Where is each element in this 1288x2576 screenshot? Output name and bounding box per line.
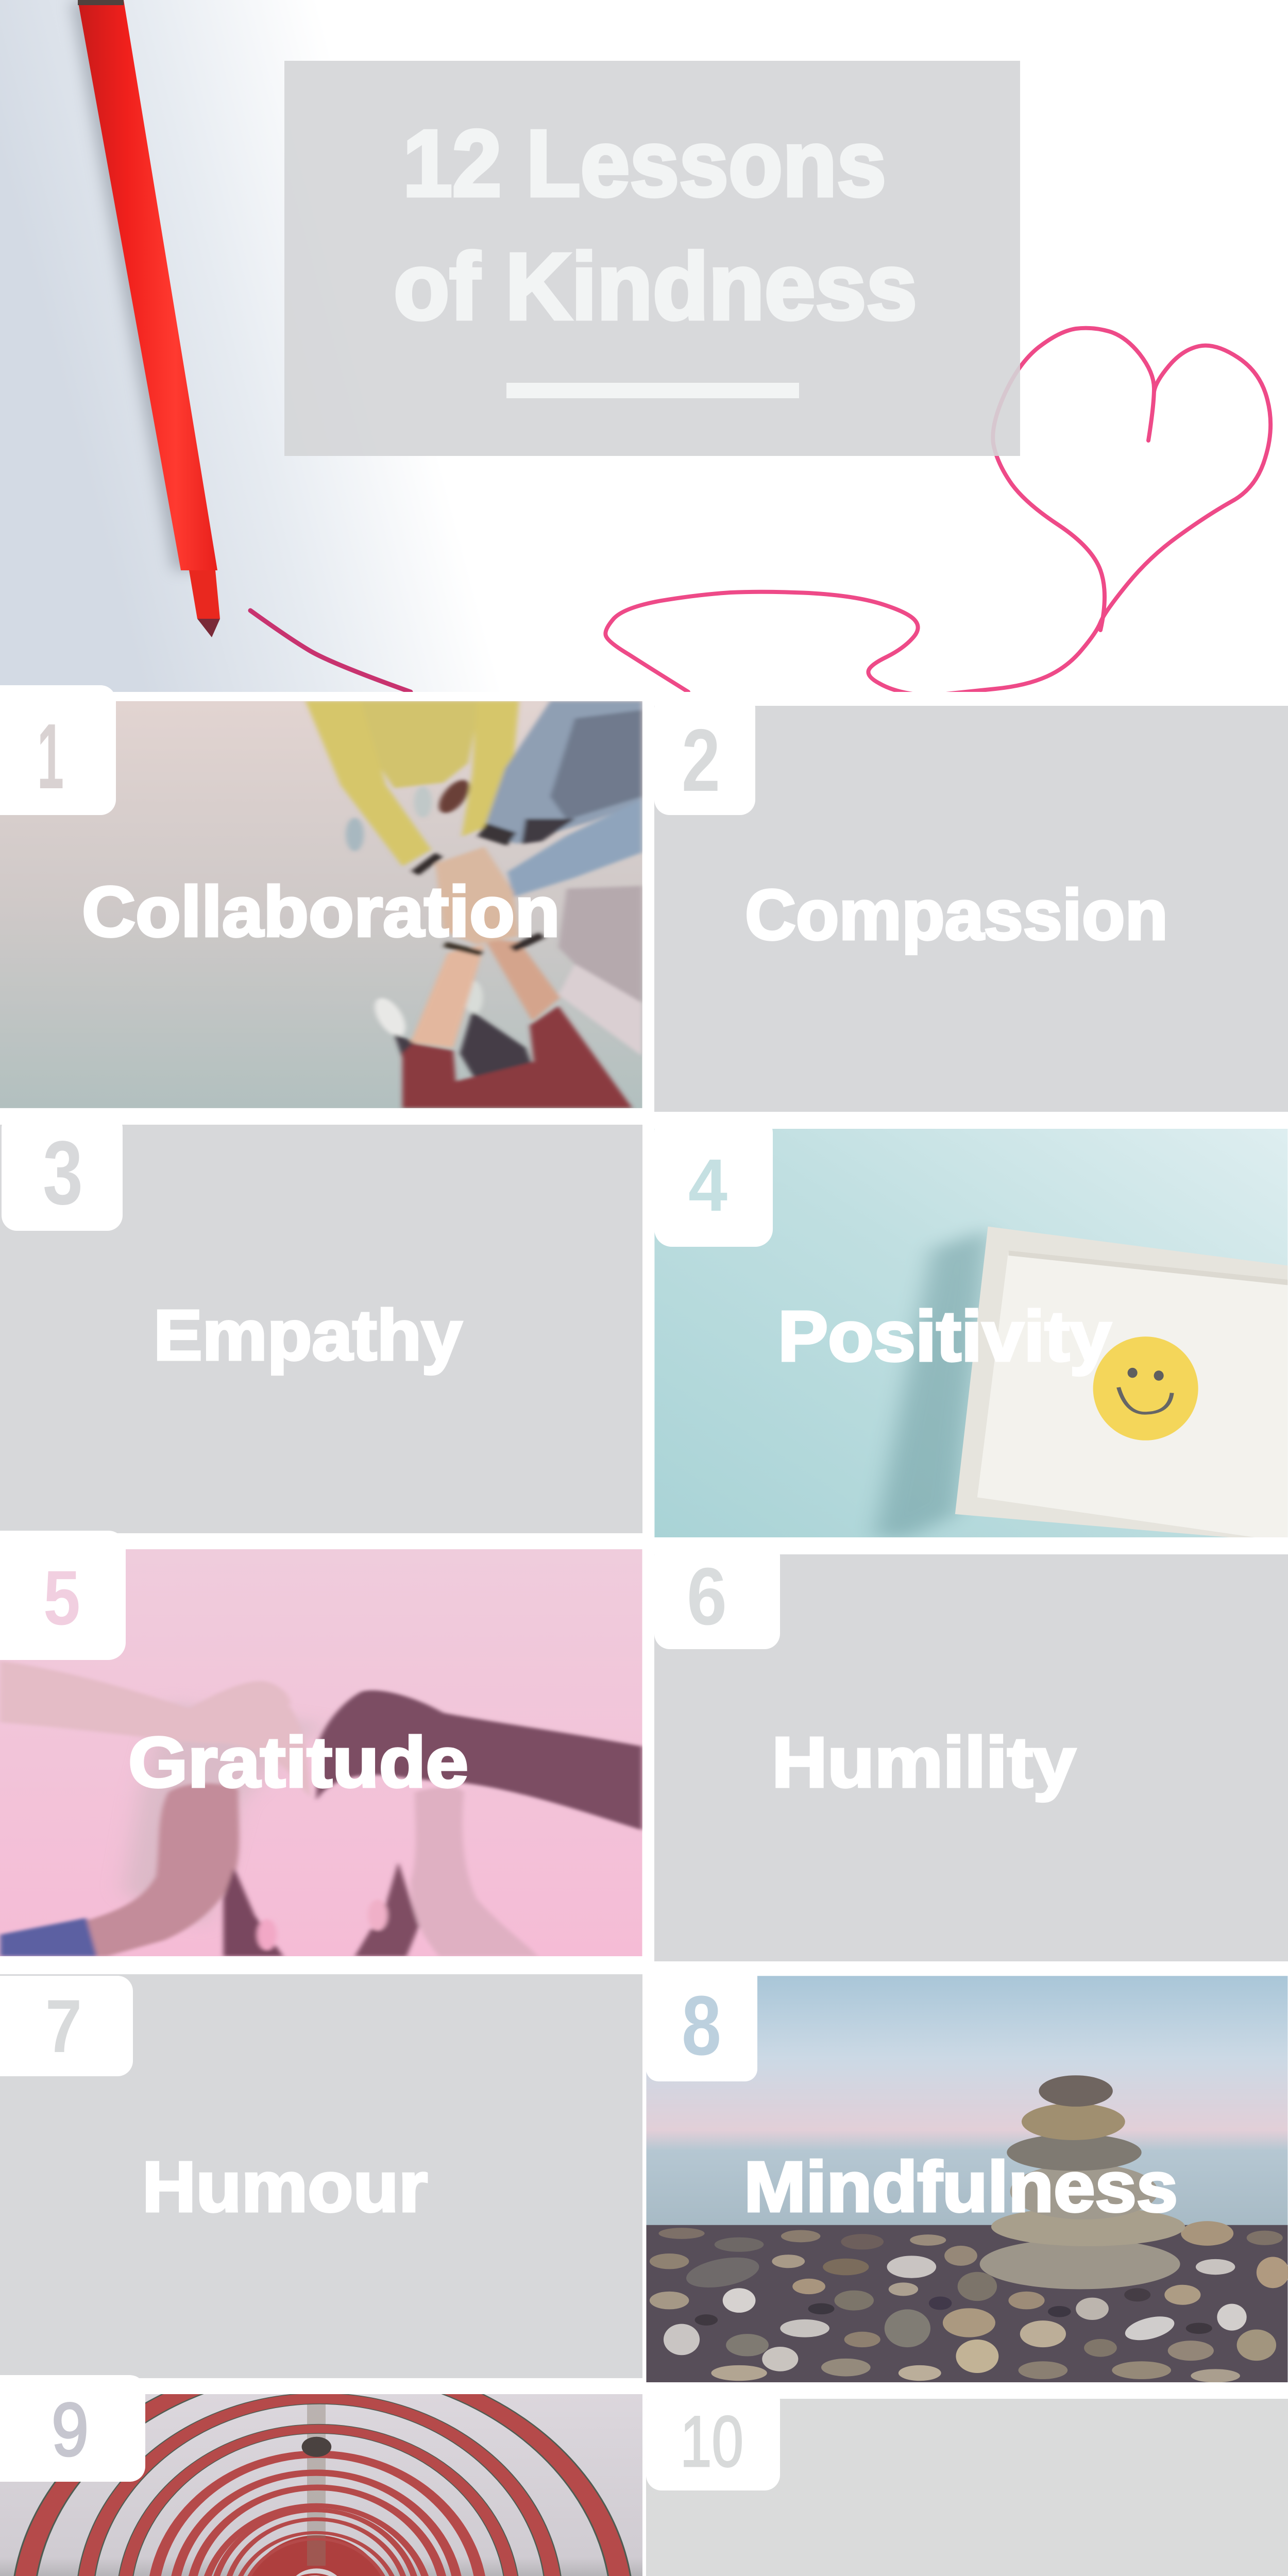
label: Mindfulness: Mindfulness [744, 2147, 1178, 2227]
badge 9 [0, 2375, 145, 2482]
panel 10: honesty [646, 2399, 1288, 2576]
photo: smiley in a box [654, 1129, 1287, 1537]
title underline [506, 383, 799, 398]
arch dark edges [23, 2365, 622, 2576]
badge 4 [654, 1115, 773, 1247]
number 9: 9 [52, 2387, 89, 2471]
icon: smiley [1093, 1336, 1198, 1440]
label: Humility: Humility [772, 1723, 1076, 1802]
title: 12 Lessons [403, 110, 886, 216]
number 3: 3 [43, 1123, 83, 1224]
number 4: 4 [688, 1144, 727, 1227]
panel 8: mindfulness [646, 1976, 1288, 2382]
badge 6 [654, 1540, 780, 1649]
icon: red pen [70, 0, 220, 637]
panel 5: gratitude [0, 1549, 642, 1956]
label: Positivity: Positivity [778, 1297, 1111, 1376]
icon: ceiling lamp [302, 2437, 331, 2457]
panel 3: empathy [0, 1125, 642, 1533]
number 2: 2 [682, 711, 720, 810]
badge 7 [0, 1976, 133, 2076]
panel 2: compassion [654, 706, 1288, 1112]
badge 10 [646, 2385, 780, 2490]
title: of Kindness [394, 233, 917, 339]
icon: stone stack [980, 2075, 1185, 2289]
panel 4: positivity [654, 1129, 1287, 1537]
label: Compassion: Compassion [745, 875, 1168, 955]
label: Collaboration: Collaboration [82, 872, 560, 952]
badge 8 [646, 1963, 757, 2081]
title panel [284, 61, 1020, 456]
number 10: 10 [680, 2401, 743, 2482]
photo: red arched walkway [0, 2320, 783, 2576]
panel 6: humility [654, 1554, 1288, 1961]
badge 2 [654, 693, 755, 815]
photo: hands forming a heart [0, 1549, 642, 1956]
label: Humour: Humour [142, 2147, 428, 2227]
panel 9: perspective [0, 2320, 783, 2576]
number 6: 6 [687, 1551, 727, 1642]
badge 1 [0, 685, 116, 815]
number 8: 8 [682, 1978, 721, 2073]
panel 1: collaboration [0, 701, 642, 1108]
number 7: 7 [45, 1984, 82, 2068]
title [394, 110, 917, 339]
arch frames [0, 2320, 783, 2576]
number 1: 1 [37, 705, 64, 808]
label: Empathy: Empathy [154, 1296, 462, 1375]
number 5: 5 [43, 1554, 80, 1641]
badge 3 [2, 1113, 123, 1231]
panel 7: humour [0, 1974, 642, 2378]
icon: pink hand-drawn heart line [250, 328, 1270, 695]
photo: stacked hands [0, 701, 642, 1108]
header photo: pen and heart [0, 0, 1288, 695]
label: Gratitude: Gratitude [128, 1723, 468, 1802]
badge 5 [0, 1531, 126, 1660]
photo: stacked stones on a beach [646, 1976, 1288, 2382]
